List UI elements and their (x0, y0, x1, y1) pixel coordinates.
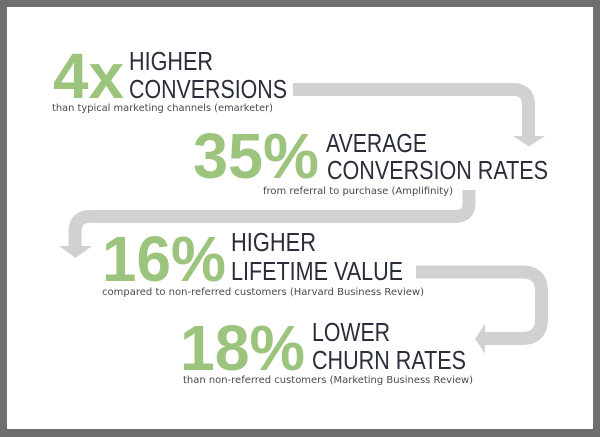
source note: from referral to purchase (Amplifinity) (263, 186, 453, 197)
stat: 16% higher lifetime value (102, 223, 424, 298)
number: 35%: 35% (193, 120, 319, 192)
source note: than typical marketing channels (emarketer) (52, 103, 273, 114)
source note: compared to non-referred customers (Harvard Business Review) (102, 287, 424, 298)
heading: higher lifetime value (231, 229, 403, 286)
heading: higher conversions (129, 48, 287, 104)
stat: 4x higher conversions (52, 40, 287, 114)
heading: lower churn rates: LOWER (312, 319, 390, 347)
source note: than non-referred customers (Marketing Business Review) (183, 375, 473, 386)
stat: 35% average conversion rates (193, 120, 548, 197)
heading: lower churn rates: CHURN RATES (312, 347, 466, 375)
number: 18%: 18% (180, 312, 305, 384)
number: 4x: 4x (53, 40, 124, 112)
arrow: from 16% row to 18% row (416, 272, 542, 354)
heading: lower churn rates (312, 319, 466, 375)
stat: 18% lower churn rates (180, 312, 473, 386)
heading: average conversion rates: AVERAGE (326, 130, 427, 158)
heading: average conversion rates: CONVERSION RATES (327, 157, 548, 185)
arrow: from 4x row to 35% row (293, 90, 545, 146)
arrow: from 35% row to 16% row (59, 190, 469, 258)
number: 16%: 16% (102, 223, 226, 295)
heading: higher conversions: HIGHER (129, 48, 213, 76)
heading: average conversion rates (326, 130, 548, 185)
heading: higher conversions: CONVERSIONS (129, 76, 287, 104)
heading: higher lifetime value: HIGHER (231, 229, 316, 257)
heading: higher lifetime value: LIFETIME VALUE (231, 258, 403, 286)
